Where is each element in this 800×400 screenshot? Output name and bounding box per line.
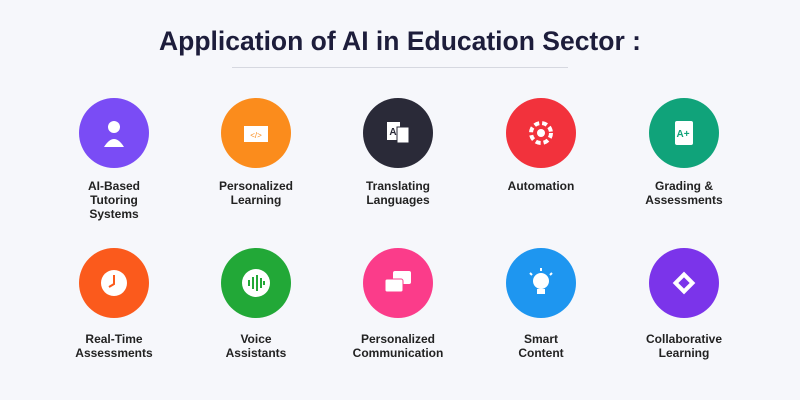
item: Collaborative Learning bbox=[646, 248, 722, 360]
item: Personalized Learning: </> bbox=[250, 131, 262, 140]
title: Application of AI in Education Sector : bbox=[159, 26, 641, 56]
item: Collaborative Learning: Learning bbox=[659, 346, 709, 360]
item: Grading & Assessments: Grading & bbox=[655, 179, 713, 193]
item: Personalized Communication: Communication bbox=[353, 346, 443, 360]
item: Grading & Assessments: A+ bbox=[676, 129, 690, 140]
item: Real-Time Assessments: Assessments bbox=[75, 346, 153, 360]
item: Personalized Communication: Personalized bbox=[361, 332, 435, 346]
item: Smart Content: Content bbox=[518, 346, 564, 360]
item: AI-Based Tutoring Systems bbox=[79, 98, 149, 221]
item: Voice Assistants: Assistants bbox=[226, 346, 286, 360]
item: AI-Based Tutoring Systems: AI-Based bbox=[88, 179, 140, 193]
item: Automation: Automation bbox=[508, 179, 574, 193]
item: Voice Assistants: Voice bbox=[240, 332, 272, 346]
item: AI-Based Tutoring Systems: Systems bbox=[89, 207, 139, 221]
item: Automation bbox=[506, 98, 576, 193]
item: Smart Content bbox=[506, 248, 576, 360]
item: Grading & Assessments bbox=[645, 98, 723, 207]
item: Personalized Learning: Learning bbox=[231, 193, 281, 207]
item: Grading & Assessments: Assessments bbox=[645, 193, 723, 207]
item: Personalized Learning: Personalized bbox=[219, 179, 293, 193]
item: Personalized Communication bbox=[353, 248, 443, 360]
item: Collaborative Learning: Collaborative bbox=[646, 332, 722, 346]
item: Translating Languages: A bbox=[389, 127, 397, 138]
item: Translating Languages bbox=[363, 98, 433, 207]
item: Translating Languages: Translating bbox=[366, 179, 430, 193]
item: Real-Time Assessments bbox=[75, 248, 153, 360]
item: Real-Time Assessments: Real-Time bbox=[85, 332, 143, 346]
item: Smart Content: Smart bbox=[524, 332, 558, 346]
item: Personalized Learning bbox=[219, 98, 293, 207]
item: Translating Languages: Languages bbox=[366, 193, 430, 207]
item: AI-Based Tutoring Systems: Tutoring bbox=[90, 193, 138, 207]
item: Voice Assistants bbox=[221, 248, 291, 360]
